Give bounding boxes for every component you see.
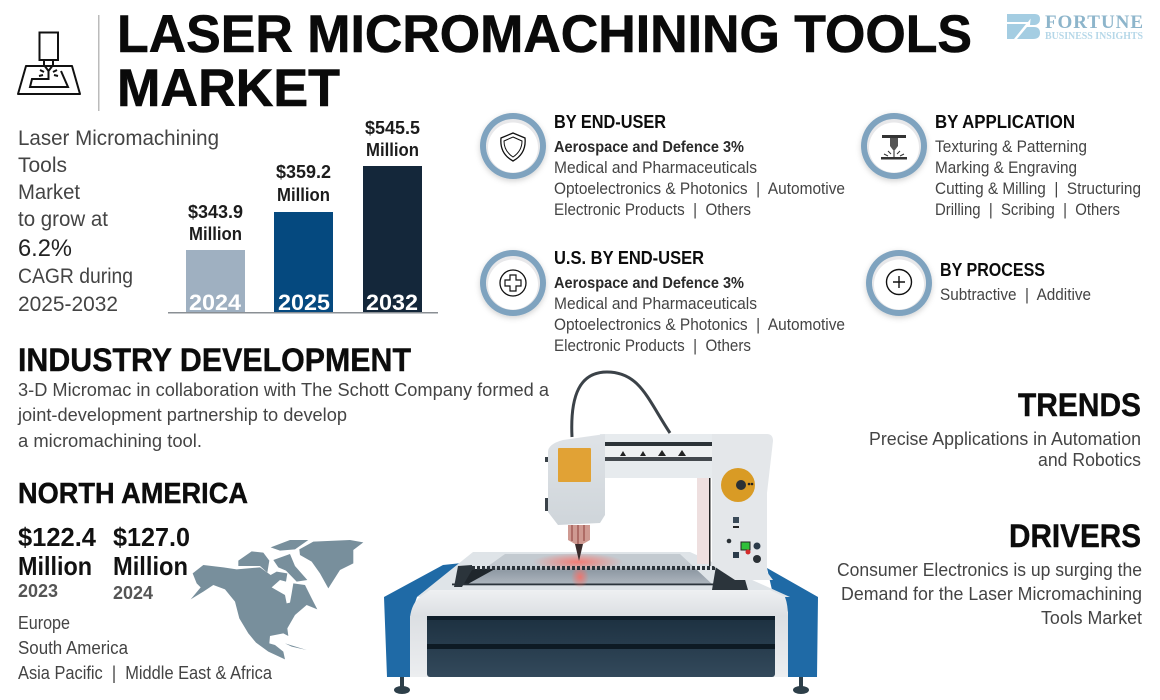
icon: laser cutter badge: [861, 113, 927, 179]
bar chart: market size by year: $343.9: [188, 202, 243, 222]
head side stubs: [545, 457, 549, 511]
panel: industry development: [17, 342, 550, 451]
arm: [600, 434, 713, 478]
title: LASER MICROMACHINING TOOLS: [117, 5, 972, 64]
panel: by end-user: Aerospace and Defence 3%: [554, 139, 744, 156]
pillar: [697, 478, 710, 564]
panel: U.S. by end-user: U.S. BY END-USER: [554, 248, 704, 268]
panel: drivers: Demand for the Laser Micromachining: [841, 584, 1142, 604]
text block: other regions: South America: [18, 638, 129, 658]
icon: plus badge: [866, 250, 932, 316]
panel: U.S. by end-user: Electronic Products | Others: [554, 336, 751, 355]
panel: trends: and Robotics: [1038, 450, 1141, 470]
bar chart: market size by year: 2032: [366, 290, 418, 315]
bar chart: market size by year: 2025: [278, 290, 330, 315]
panel: industry development: a micromachining tool.: [18, 431, 202, 451]
bar chart: market size by year: Million: [277, 185, 330, 205]
table glass: [463, 554, 712, 584]
panel: north america: $127.0: [113, 522, 190, 552]
panel: U.S. by end-user: [554, 248, 845, 355]
panel: industry development: INDUSTRY DEVELOPMENT: [18, 342, 411, 378]
panel: by end-user: Optoelectronics & Photonics | Automotive: [554, 179, 845, 198]
panel: trends: Precise Applications in Automation: [869, 429, 1141, 449]
text block: other regions: [18, 613, 273, 683]
panel: north america: NORTH AMERICA: [18, 478, 248, 510]
cable: [572, 372, 670, 437]
bar chart: market size by year: [168, 118, 438, 315]
panel: by application: BY APPLICATION: [935, 112, 1075, 132]
text block: other regions: Europe: [18, 613, 70, 633]
panel: by end-user: Medical and Pharmaceuticals: [554, 158, 757, 177]
bar chart: market size by year: 2024: [189, 290, 242, 315]
text block: other regions: Asia Pacific | Middle East & Africa: [18, 663, 273, 683]
bar chart: market size by year: Million: [366, 140, 419, 160]
panel: by application: Texturing & Patterning: [935, 137, 1087, 156]
panel: north america: 2023: [18, 581, 58, 601]
text block: market growth summary: 6.2%: [18, 235, 72, 262]
logo: Fortune Business Insights: FORTUNE: [1045, 12, 1143, 33]
right column: [712, 434, 773, 580]
icon: medical cross badge: [480, 250, 546, 316]
title: [117, 5, 972, 118]
icon: laser machine outline: [18, 32, 80, 94]
panel: north america: 2024: [113, 583, 153, 603]
panel: trends: TRENDS: [1018, 387, 1141, 423]
dial: [721, 468, 755, 502]
panel: north america: $122.4: [18, 522, 97, 552]
panel: by process: Subtractive | Additive: [940, 285, 1091, 304]
bar chart: market size by year: $545.5: [365, 118, 420, 138]
text block: market growth summary: 2025-2032: [18, 293, 118, 316]
panel: trends: [869, 387, 1141, 470]
panel: drivers: Tools Market: [1041, 608, 1142, 628]
panel: north america: Million: [18, 551, 92, 581]
panel: by application: [935, 112, 1141, 219]
panel: U.S. by end-user: Aerospace and Defence 3%: [554, 275, 744, 292]
illustration: laser micromachining machine: [384, 372, 818, 694]
laser head: [548, 434, 605, 525]
icon: shield badge: [480, 113, 546, 179]
panel: by process: [940, 260, 1091, 304]
logo: Fortune Business Insights: [1007, 12, 1143, 42]
bar chart: market size by year: Million: [189, 224, 242, 244]
panel: by end-user: [554, 112, 845, 219]
text block: market growth summary: [18, 127, 219, 316]
panel: drivers: DRIVERS: [1009, 518, 1141, 554]
text block: market growth summary: Market: [18, 181, 80, 204]
logo: Fortune Business Insights: BUSINESS INSIGHTS: [1045, 31, 1143, 42]
nozzle: [568, 525, 590, 561]
upper frame and deck: [417, 552, 790, 597]
panel: by application: Drilling | Scribing | Others: [935, 200, 1120, 219]
bar chart: market size by year: $359.2: [276, 162, 331, 182]
panel: by end-user: BY END-USER: [554, 112, 666, 132]
panel: north america: Million: [113, 551, 188, 581]
dark corner under rail: [455, 569, 495, 585]
panel: industry development: joint-development partnership to develop: [17, 405, 347, 425]
control buttons: [727, 517, 761, 563]
blue side panels: [384, 563, 818, 677]
panel: by application: Marking & Engraving: [935, 158, 1077, 177]
text block: market growth summary: to grow at: [18, 208, 108, 231]
panel: by end-user: Electronic Products | Others: [554, 200, 751, 219]
panel: U.S. by end-user: Medical and Pharmaceuticals: [554, 294, 757, 313]
panel: industry development: 3-D Micromac in collaboration with The Schott Company formed a: [18, 380, 550, 400]
panel: by process: BY PROCESS: [940, 260, 1045, 280]
laser glow: [533, 553, 623, 571]
text block: market growth summary: Tools: [18, 154, 67, 177]
machine body: [410, 590, 788, 677]
machine feet: [394, 677, 809, 694]
text block: market growth summary: CAGR during: [18, 265, 133, 288]
panel: U.S. by end-user: Optoelectronics & Photonics | Automotive: [554, 315, 845, 334]
orange panel: [558, 448, 591, 482]
panel: drivers: [837, 518, 1142, 628]
text block: market growth summary: Laser Micromachining: [18, 127, 219, 150]
panel: by application: Cutting & Milling | Structuring: [935, 179, 1141, 198]
drawers: [427, 616, 775, 677]
title: MARKET: [117, 59, 340, 118]
map: North America: [191, 540, 363, 659]
gantry rail: [454, 565, 748, 590]
panel: north america: [18, 478, 248, 603]
panel: drivers: Consumer Electronics is up surging the: [837, 560, 1142, 580]
